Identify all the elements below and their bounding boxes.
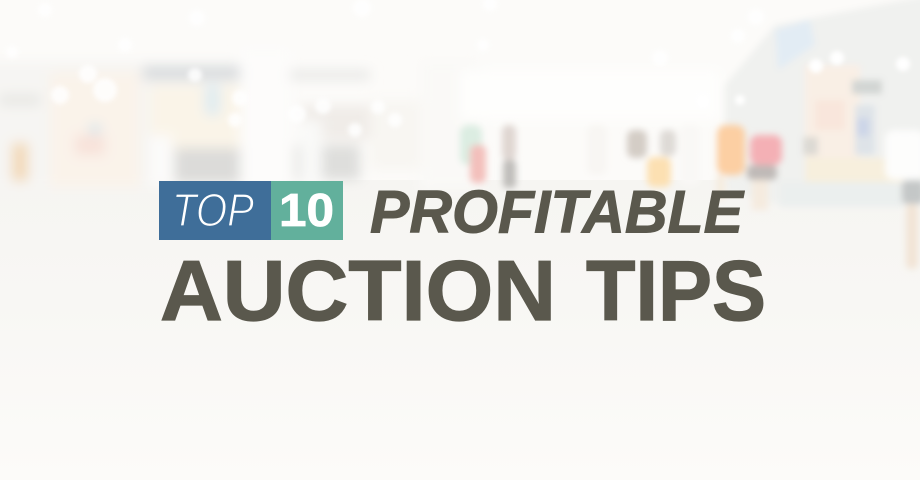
storefront on the right [725,0,920,207]
heading: AUCTION TIPS: AUCTION [160,244,556,339]
badge: 10: 10 [279,184,334,236]
heading: AUCTION TIPS [160,244,766,339]
heading: AUCTION TIPS: TIPS [586,244,766,339]
bokeh lights [6,0,764,137]
badge: 10 [271,181,343,240]
heading: PROFITABLE: PROFITABLE [370,178,745,246]
title block [159,178,766,339]
blurred shoppers [460,125,920,269]
badge: TOP: TOP [172,184,254,236]
